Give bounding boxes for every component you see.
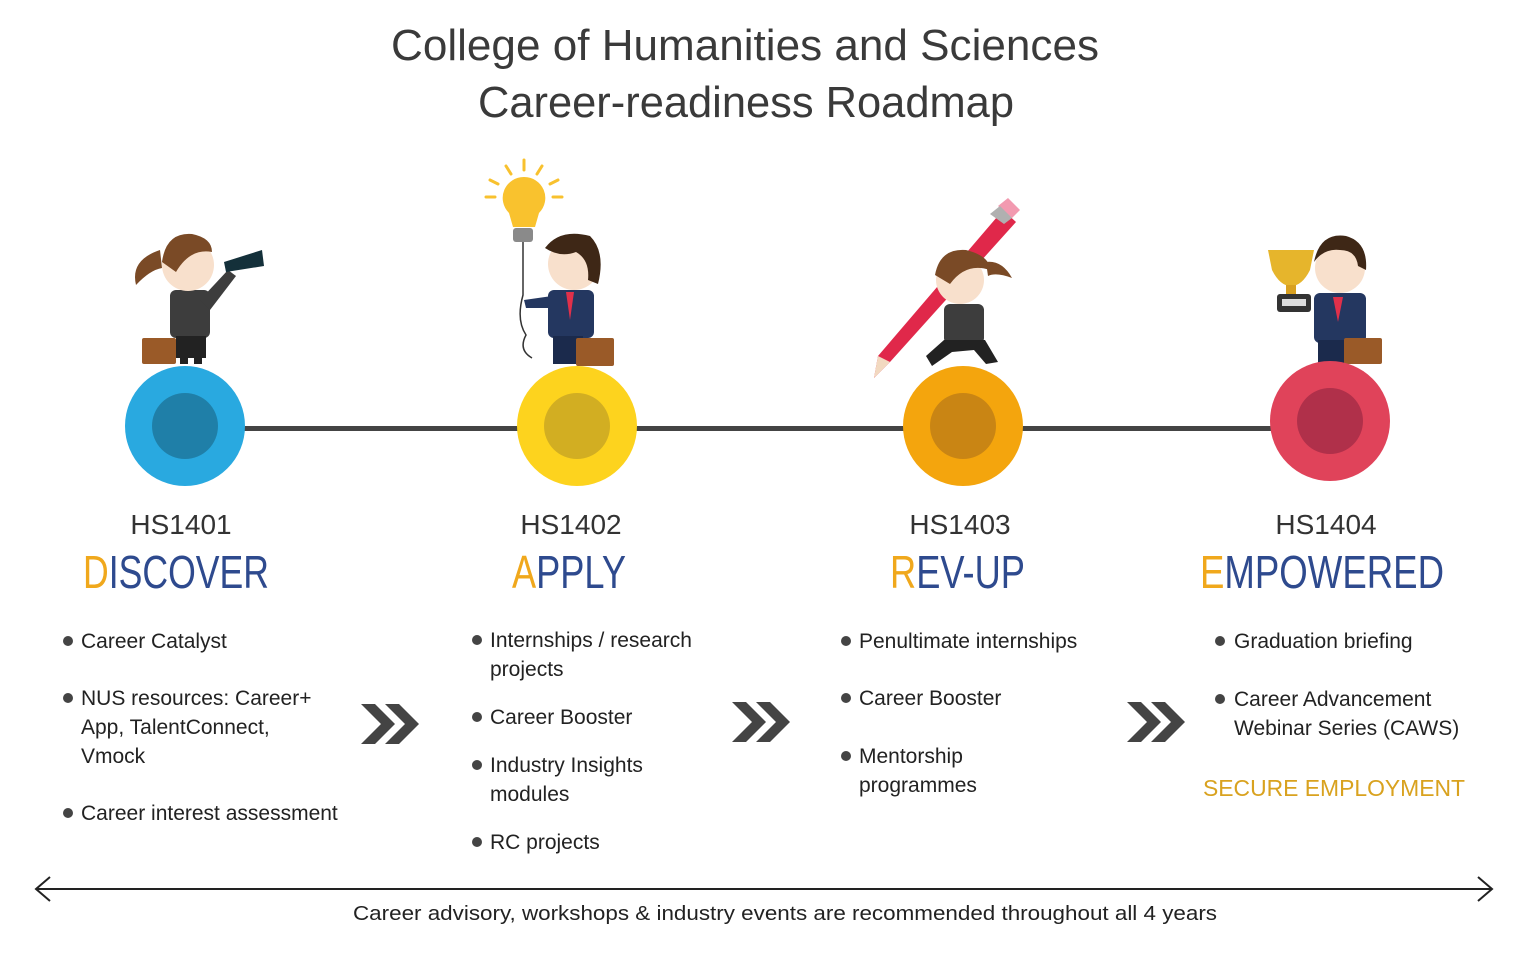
stage titles: [83, 546, 1444, 598]
bullets: apply: Industry Insights: [490, 754, 643, 777]
timeline line: [185, 426, 1330, 431]
bullets: rev-up: [841, 630, 1077, 797]
course codes: HS1403: [909, 509, 1011, 540]
stage titles: DISCOVER: [83, 546, 269, 598]
bullets: rev-up: Penultimate internships: [859, 630, 1077, 653]
figure: man with lightbulb: [486, 160, 614, 366]
footnote: Career advisory, workshops & industry events are recommended throughout all 4 years: [353, 903, 1217, 925]
bullets: empowered: SECURE EMPLOYMENT: [1203, 775, 1465, 801]
bullets: discover: Career Catalyst: [81, 630, 227, 653]
title: Career-readiness Roadmap: [478, 78, 1014, 127]
bullets: empowered: Graduation briefing: [1234, 630, 1413, 653]
stage titles: APPLY: [512, 546, 626, 598]
title: College of Humanities and Sciences: [391, 21, 1099, 70]
bullets: rev-up: Mentorship: [859, 745, 963, 768]
course codes: HS1404: [1275, 509, 1377, 540]
milestone circles: [125, 361, 1390, 486]
stage titles: EMPOWERED: [1200, 546, 1444, 598]
figure: woman with pencil: [874, 198, 1020, 378]
bullets: empowered: [1203, 630, 1465, 801]
stage titles: REV-UP: [890, 546, 1025, 598]
bullets: apply: modules: [490, 783, 569, 806]
bullets: rev-up: programmes: [859, 774, 977, 797]
bullets: empowered: Webinar Series (CAWS): [1234, 717, 1459, 740]
bullets: discover: Vmock: [81, 745, 146, 768]
bullets: discover: App, TalentConnect,: [81, 716, 270, 739]
course codes: HS1401: [130, 509, 232, 540]
bullets: apply: RC projects: [490, 831, 600, 854]
bullets: discover: [63, 630, 338, 825]
bullets: discover: NUS resources: Career+: [81, 687, 312, 710]
bullets: apply: projects: [490, 658, 564, 681]
bullets: apply: Internships / research: [490, 629, 692, 652]
bottom double arrow: [36, 877, 1492, 901]
title: [391, 21, 1099, 127]
bullets: discover: Career interest assessment: [81, 802, 338, 825]
bullets: apply: Career Booster: [490, 706, 632, 729]
chevron arrows: [361, 702, 1185, 744]
figure: man with trophy: [1268, 236, 1382, 364]
bullets: rev-up: Career Booster: [859, 687, 1001, 710]
figure: woman with telescope: [135, 234, 264, 364]
bullets: apply: [472, 629, 692, 854]
bullets: empowered: Career Advancement: [1234, 688, 1431, 711]
course codes: HS1402: [520, 509, 622, 540]
course codes: [130, 509, 1377, 540]
